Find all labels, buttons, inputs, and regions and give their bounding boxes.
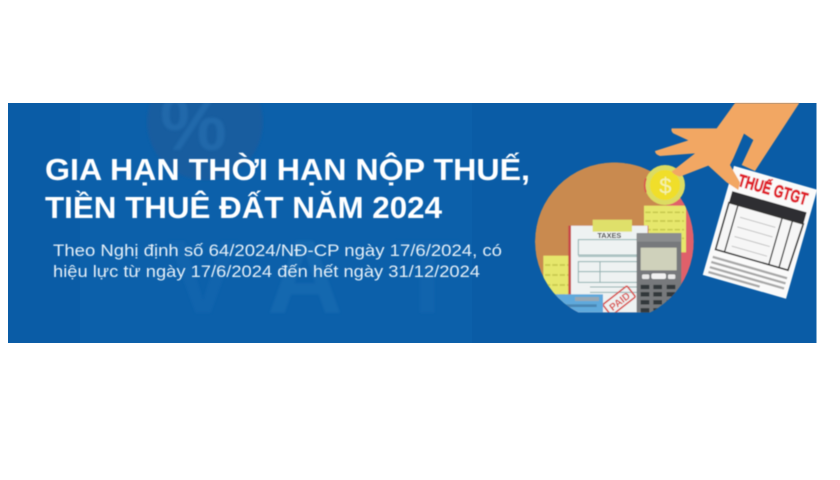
icon: tax documents in circle xyxy=(535,162,697,322)
watermark: percent and VAT letters: A xyxy=(267,219,343,336)
subtitle: hiệu lực từ ngày 17/6/2024 đến hết ngày 31/12/2024 xyxy=(53,263,480,281)
icon: tax invoice sheet xyxy=(703,166,817,299)
icon: clipboard tax form xyxy=(568,220,648,316)
watermark: percent and VAT letters: T xyxy=(395,219,459,336)
stamp: paid: PAID xyxy=(608,291,633,314)
watermark: percent and VAT letters xyxy=(162,103,224,150)
watermark: percent and VAT letters: % xyxy=(160,82,227,166)
subtitle: Theo Nghị định số 64/2024/NĐ-CP ngày 17/6/2024, có xyxy=(53,242,502,260)
subtitle xyxy=(53,242,502,281)
icon: calculator xyxy=(637,233,681,315)
watermark: percent and VAT letters: V xyxy=(168,219,238,336)
icon: dollar coin: $ xyxy=(659,173,671,198)
title xyxy=(45,151,530,225)
icon: credit card xyxy=(555,294,603,314)
icon: hand xyxy=(655,103,799,190)
title: TIỀN THUÊ ĐẤT NĂM 2024 xyxy=(45,189,442,225)
icon: clipboard tax form: TAXES xyxy=(597,231,621,240)
icon: tax invoice sheet: THUẾ GTGT xyxy=(736,170,810,209)
icon: right coin stack xyxy=(644,206,686,252)
title: GIA HẠN THỜI HẠN NỘP THUẾ, xyxy=(45,151,530,187)
icon: dollar coin xyxy=(645,165,685,205)
icon: left coin stack xyxy=(542,255,570,304)
banner background xyxy=(8,103,816,343)
illustration xyxy=(535,103,817,322)
